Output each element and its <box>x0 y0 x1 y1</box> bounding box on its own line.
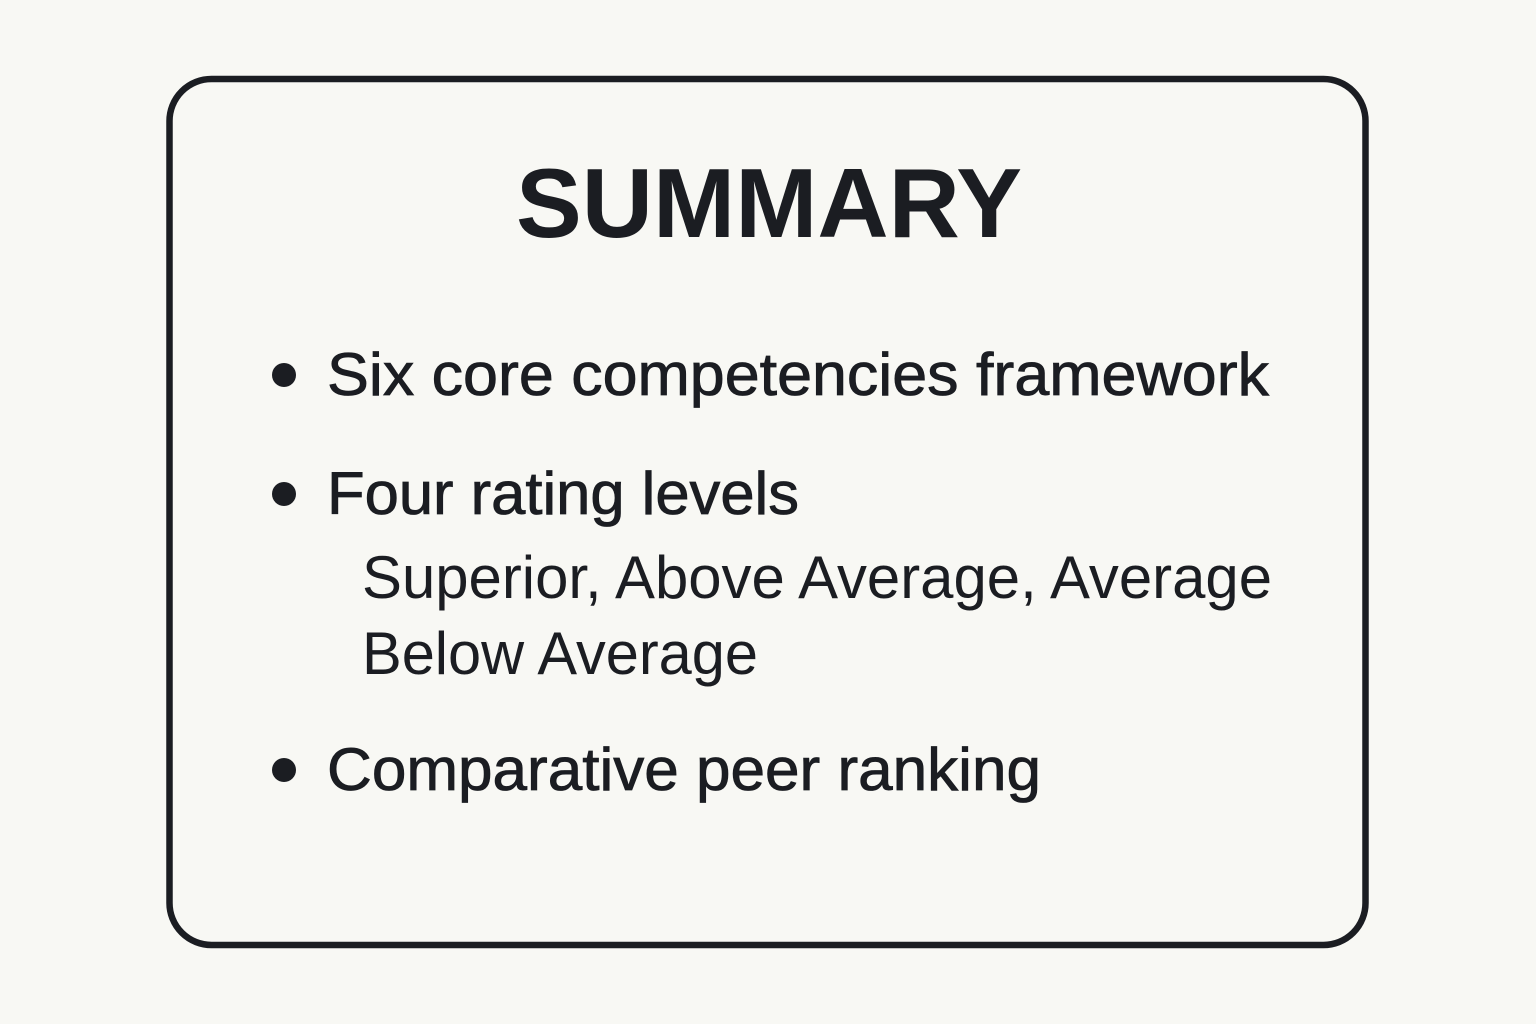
panel: summary card <box>170 79 1366 945</box>
bullet: comparative peer ranking: Comparative peer ranking <box>327 736 1041 803</box>
text: rating levels list: Below Average <box>362 620 758 687</box>
text: rating levels list <box>362 544 1272 687</box>
title: SUMMARY <box>516 148 1022 258</box>
bullet: six core competencies: Six core competencies framework <box>327 341 1270 408</box>
text: rating levels list: Superior, Above Average, Average <box>362 544 1272 611</box>
bullet: four rating levels: Four rating levels <box>327 460 799 527</box>
